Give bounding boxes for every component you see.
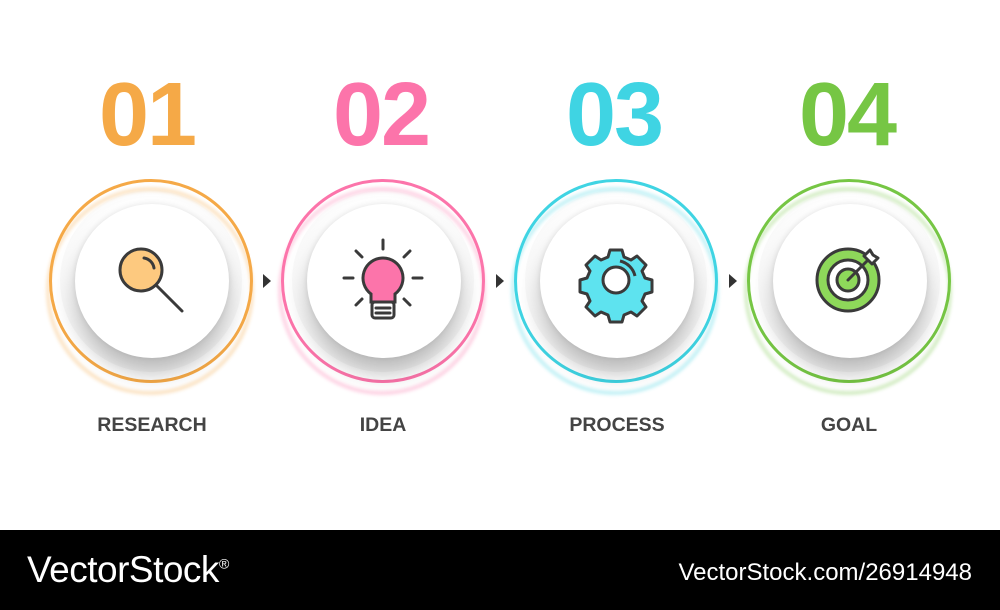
step 2 circle	[276, 179, 488, 396]
label: process: PROCESS	[569, 414, 665, 436]
label: goal: GOAL	[821, 414, 877, 436]
footer url: VectorStock.com/26914948	[678, 559, 972, 586]
number 04: 04	[799, 65, 895, 165]
number 01: 01	[99, 65, 195, 165]
step 1 circle	[44, 179, 256, 396]
step 4 circle	[742, 179, 954, 396]
arrow 3	[729, 274, 737, 288]
icon: magnifier	[120, 249, 182, 311]
footer	[0, 530, 1000, 610]
arrow 2	[496, 274, 504, 288]
icon: gear	[580, 250, 652, 322]
number 02: 02	[333, 65, 429, 165]
label: idea: IDEA	[360, 414, 406, 436]
icon: light bulb	[344, 240, 422, 318]
footer logo: VectorStock®	[27, 549, 229, 590]
icon: target	[817, 249, 879, 311]
number 03: 03	[566, 65, 662, 165]
label: research: RESEARCH	[97, 414, 207, 436]
arrow 1	[263, 274, 271, 288]
step 3 circle	[510, 179, 720, 396]
